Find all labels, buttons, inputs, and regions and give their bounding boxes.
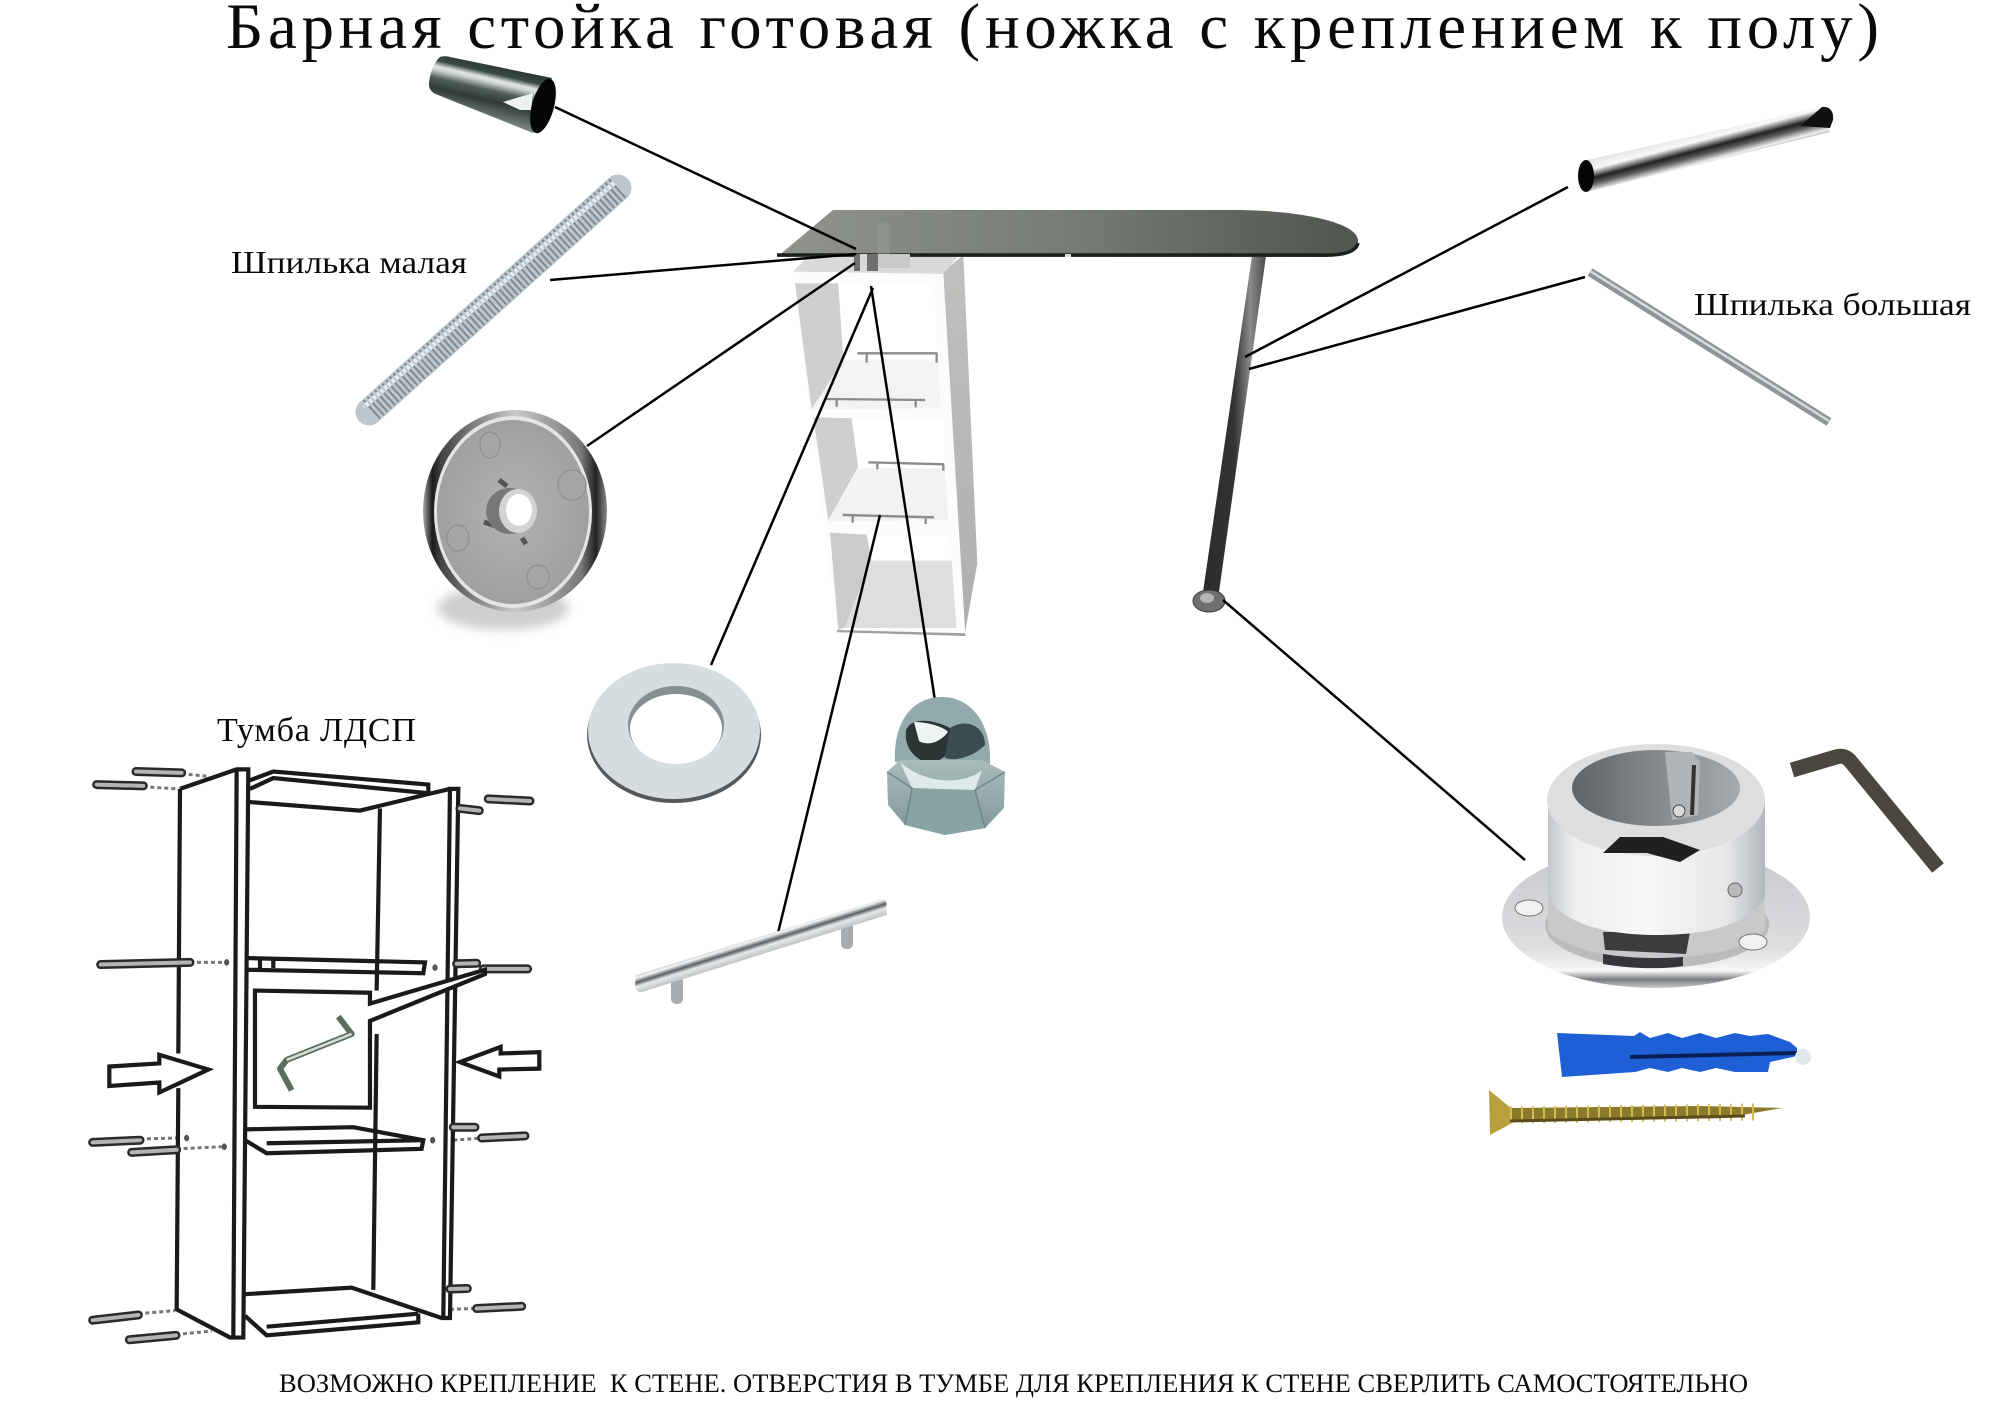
label: large stud: Шпилька большая <box>1694 286 1971 322</box>
part: long tube <box>1578 107 1833 192</box>
diagram: inset callout <box>255 970 485 1108</box>
diagram: middle shelf <box>247 958 425 973</box>
diagram: hardware bolts <box>93 772 530 1340</box>
label: cabinet: Тумба ЛДСП <box>217 712 416 749</box>
part: gold screw <box>1489 1090 1782 1135</box>
cabinet assembly diagram <box>93 769 539 1340</box>
leg foot <box>1193 590 1225 612</box>
part: flat washer <box>587 663 761 803</box>
label: small stud: Шпилька малая <box>231 244 467 280</box>
diagram: dashed bolt paths <box>138 774 482 1335</box>
diagram: top shelf <box>248 772 450 811</box>
part: hex key <box>1792 756 1938 868</box>
leader lines <box>550 107 1585 933</box>
part: long stud <box>1590 271 1829 422</box>
diagram: lower shelf <box>245 1127 423 1153</box>
part: blue wall plug <box>1557 1032 1811 1077</box>
table leg <box>1203 256 1266 592</box>
part: metal disc <box>423 410 607 630</box>
glass tabletop <box>777 210 1358 257</box>
diagram: right arrow <box>460 1047 539 1076</box>
part: cap nut <box>887 697 1005 835</box>
diagram: inset hex key <box>280 1017 352 1090</box>
footer note: ВОЗМОЖНО КРЕПЛЕНИЕ К СТЕНЕ. ОТВЕРСТИЯ В ТУМБЕ ДЛЯ КРЕПЛЕНИЯ К СТЕНЕ СВЕРЛИТЬ САМОСТОЯТЕЛЬНО <box>279 1369 1748 1398</box>
part: small threaded rod <box>364 183 618 412</box>
cabinet <box>793 250 977 636</box>
diagram: right side panel <box>373 789 458 1318</box>
part: bar handle <box>635 899 887 1004</box>
bar table assembly <box>777 210 1358 636</box>
table mount post <box>854 254 910 271</box>
diagram: bottom shelf <box>245 1288 442 1335</box>
diagram: left arrow <box>109 1055 208 1092</box>
part: floor flange <box>1502 744 1810 988</box>
diagram: left side panel <box>177 769 248 1338</box>
part: short tube <box>429 56 561 136</box>
